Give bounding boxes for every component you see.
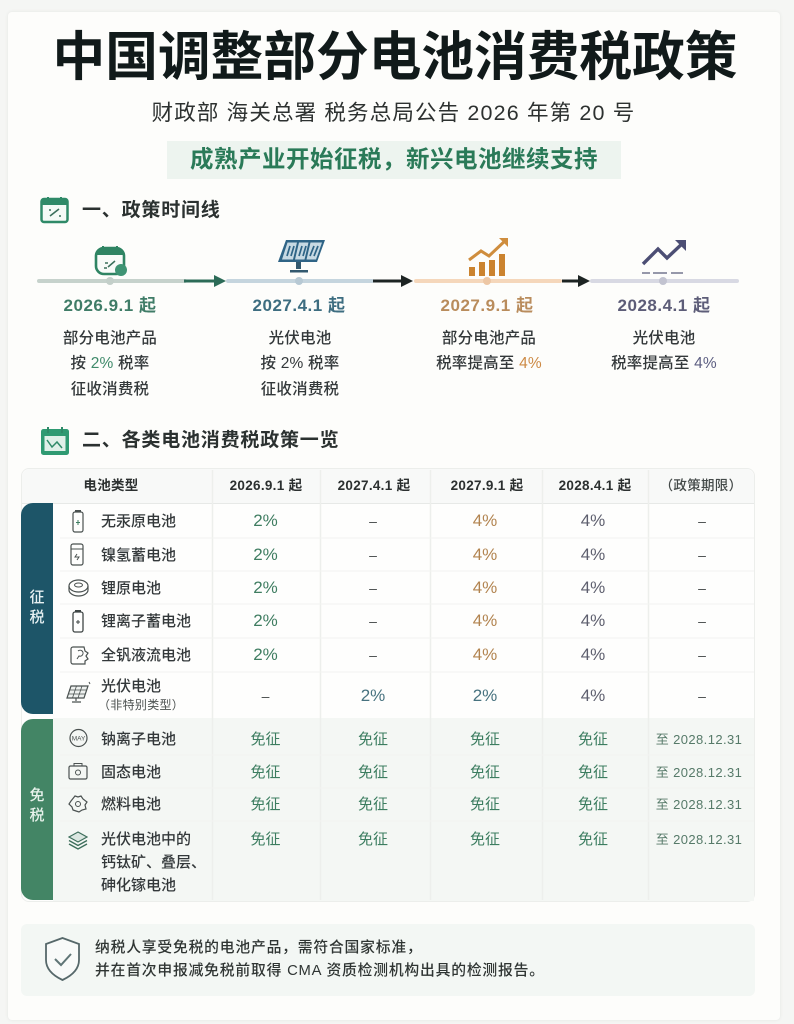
icon: calendar with badge	[94, 246, 127, 276]
rates: 4%	[581, 645, 605, 664]
statuses: 免征	[578, 730, 608, 748]
rates	[253, 545, 706, 564]
rates: –	[698, 513, 706, 529]
name: 镍氢蓄电池	[101, 547, 176, 564]
icon: battery	[72, 610, 84, 633]
statuses: 免征	[578, 796, 608, 812]
name: 燃料电池	[101, 796, 161, 812]
milestone 1 description: 按 2% 税率	[71, 355, 149, 372]
name: 固态电池	[101, 764, 161, 780]
rates: 4%	[473, 545, 497, 564]
timeline dots	[106, 277, 667, 285]
milestone 3 date: 2027.9.1 起	[441, 296, 533, 315]
icon: section two chart calendar	[41, 427, 69, 455]
statuses: 至 2028.12.31	[656, 764, 742, 780]
statuses: 免征	[578, 764, 608, 780]
icon: solar panel	[278, 240, 325, 272]
timeline segment 3	[414, 279, 562, 283]
rates: 4%	[581, 686, 605, 705]
rates: 4%	[473, 645, 497, 664]
milestone 4 date: 2028.4.1 起	[618, 296, 710, 315]
statuses: 免征	[358, 831, 388, 848]
timeline segment 2	[226, 279, 374, 283]
rates: 2%	[253, 511, 278, 530]
statuses: 至 2028.12.31	[656, 732, 742, 746]
rates	[253, 578, 706, 597]
statuses: 免征	[470, 796, 500, 812]
rates: 2%	[253, 578, 278, 597]
icon: solar panel	[66, 682, 90, 703]
rates: –	[369, 613, 377, 629]
name: 无汞原电池	[101, 513, 176, 530]
milestone 3 description: 税率提高至 4%	[436, 355, 542, 372]
statuses	[250, 764, 742, 780]
name: 锂原电池	[101, 580, 161, 597]
milestone 1 description	[63, 330, 157, 398]
arrow: third to fourth milestone	[562, 275, 590, 287]
rates: –	[698, 647, 706, 663]
name: 钙钛矿、叠层、	[101, 854, 206, 871]
name: 锂离子蓄电池	[101, 613, 191, 630]
rates: –	[262, 688, 269, 704]
note panel	[21, 924, 755, 996]
header: 2027.4.1: 2027.4.1 起	[338, 478, 410, 493]
header: 2028.4.1: 2028.4.1 起	[559, 478, 631, 493]
milestone 2 description	[260, 330, 339, 398]
rates	[253, 645, 706, 664]
name	[101, 828, 206, 897]
label: exempt group: 免	[29, 787, 44, 804]
name: 光伏电池中的	[101, 831, 191, 848]
icon: flow cell	[70, 646, 89, 665]
icon: orange rising bars	[468, 238, 508, 276]
milestone 3 description	[436, 330, 542, 372]
name with note	[98, 678, 184, 712]
rates: 2%	[473, 686, 497, 705]
milestone 3 description: 部分电池产品	[442, 330, 536, 346]
icon: sodium cell badge	[69, 728, 88, 748]
note text: 并在首次申报减免税前取得 CMA 资质检测机构出具的检测报告。	[95, 963, 545, 979]
icon: battery	[70, 543, 84, 566]
row: lithium primary battery	[68, 578, 706, 597]
label: taxed group: 征	[29, 589, 44, 606]
header: 2026.9.1: 2026.9.1 起	[230, 478, 302, 493]
note text	[95, 937, 545, 983]
heading: section two: 二、各类电池消费税政策一览	[82, 430, 339, 451]
icon: fuel cell gear	[68, 794, 88, 814]
label: exempt group	[21, 719, 53, 900]
statuses	[250, 730, 742, 748]
statuses: 免征	[470, 831, 500, 848]
statuses: 免征	[250, 831, 280, 848]
icon: coin cell	[68, 579, 89, 597]
milestone 2 description: 征收消费税	[261, 380, 339, 398]
statuses: 免征	[250, 730, 280, 748]
rates: 4%	[581, 511, 605, 530]
icon: solid-state cell	[68, 763, 88, 780]
row: nickel-metal hydride battery	[70, 543, 706, 566]
table: battery tax policy	[21, 468, 755, 902]
exempt rows tint	[53, 718, 754, 901]
statuses: 免征	[358, 730, 388, 748]
rates: 2%	[253, 645, 278, 664]
statuses: 免征	[470, 764, 500, 780]
statuses: 免征	[470, 730, 500, 748]
row: mercury-free primary battery	[72, 510, 706, 533]
rates: –	[698, 613, 706, 629]
row: photovoltaic battery	[66, 678, 706, 712]
milestone 1 date: 2026.9.1 起	[64, 296, 156, 315]
timeline segment 4	[590, 279, 739, 283]
statuses: 至 2028.12.31	[656, 796, 742, 812]
banner: key message: 成熟产业开始征税，新兴电池继续支持	[190, 146, 598, 172]
statuses	[53, 794, 755, 816]
rates: –	[369, 513, 377, 529]
label: exempt group: 税	[29, 807, 44, 824]
row: vanadium flow battery	[70, 645, 706, 665]
rates	[253, 611, 706, 630]
name with note: 光伏电池	[101, 678, 161, 695]
row: solid-state battery	[68, 763, 742, 780]
rates: 4%	[581, 545, 605, 564]
milestone 2 description: 按 2% 税率	[261, 355, 339, 372]
statuses: 免征	[250, 764, 280, 780]
name: 全钒液流电池	[101, 647, 191, 664]
label: taxed group: 税	[29, 609, 44, 626]
rates: –	[698, 580, 706, 596]
arrow: first to second milestone	[184, 275, 226, 287]
milestone 4 description: 光伏电池	[633, 330, 695, 346]
icon: sodium cell badge: MAY	[72, 736, 86, 742]
subtitle: announcement reference: 财政部 海关总署 税务总局公告 2026 年第 20 号	[152, 101, 635, 125]
label: taxed group	[21, 503, 53, 714]
timeline	[37, 238, 739, 398]
name: 钠离子电池	[101, 730, 176, 748]
icon: section one calendar	[40, 197, 69, 224]
note text: 纳税人享受免税的电池产品，需符合国家标准，	[95, 940, 423, 956]
statuses: 免征	[250, 796, 280, 812]
row: fuel cell	[53, 788, 755, 821]
rates: –	[698, 547, 706, 563]
statuses: 免征	[358, 764, 388, 780]
name: 砷化镓电池	[101, 877, 176, 894]
rates	[262, 686, 706, 705]
row: lithium-ion storage battery	[72, 610, 706, 633]
table header row	[22, 469, 754, 504]
rates: 4%	[473, 511, 497, 530]
milestone 1 description: 部分电池产品	[63, 330, 157, 346]
rates: –	[369, 547, 377, 563]
milestone 2 description: 光伏电池	[269, 330, 331, 346]
rates: 4%	[581, 578, 605, 597]
header: policy period: （政策期限）	[660, 478, 742, 493]
row: perovskite, tandem and GaAs photovoltaic batteries	[53, 826, 755, 898]
statuses: 免征	[578, 831, 608, 848]
rates: 4%	[473, 578, 497, 597]
statuses	[53, 829, 755, 851]
rates: 4%	[581, 611, 605, 630]
header: 2027.9.1: 2027.9.1 起	[451, 478, 523, 493]
row: sodium-ion battery	[69, 728, 742, 748]
heading: section one: 一、政策时间线	[82, 200, 221, 221]
header: battery type: 电池类型	[83, 478, 139, 493]
icon: purple trend line	[642, 240, 686, 274]
arrow: second to third milestone	[373, 275, 413, 287]
title: 中国调整部分电池消费税政策	[53, 28, 737, 87]
rates: –	[369, 580, 377, 596]
rates: 2%	[253, 611, 278, 630]
rates: 2%	[361, 686, 385, 705]
rates: –	[369, 647, 377, 663]
rates: 2%	[253, 545, 278, 564]
timeline segment 1	[37, 279, 187, 283]
icon: layers	[68, 831, 88, 852]
milestone 2 date: 2027.4.1 起	[253, 296, 345, 315]
statuses: 至 2028.12.31	[656, 832, 742, 847]
banner: key message	[167, 141, 621, 179]
rates	[253, 511, 706, 530]
milestone 4 description: 税率提高至 4%	[611, 355, 717, 372]
icon: shield check	[44, 936, 81, 982]
statuses: 免征	[358, 796, 388, 812]
rates: –	[698, 688, 706, 704]
name with note: （非特别类型）	[98, 698, 184, 712]
milestone 4 description	[611, 330, 717, 372]
rates: 4%	[473, 611, 497, 630]
milestone 1 description: 征收消费税	[71, 380, 149, 398]
icon: battery	[72, 510, 84, 533]
